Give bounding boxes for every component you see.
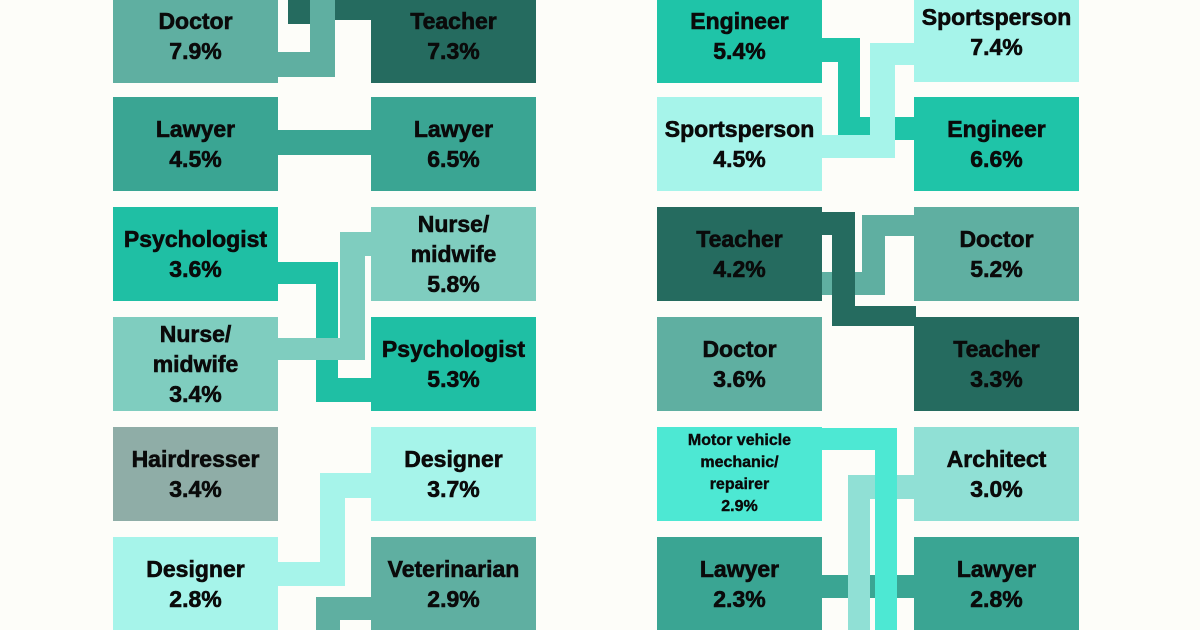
box: Engineer 6.6%: 6.6%: [970, 146, 1023, 172]
box: Hairdresser 3.4%: 3.4%: [169, 476, 222, 502]
box: Sportsperson 7.4%: Sportsperson: [922, 4, 1071, 30]
box: Teacher 7.3%: Teacher: [410, 8, 497, 34]
nurse line: [276, 232, 373, 360]
box: Lawyer 4.5%: Lawyer: [156, 116, 235, 142]
box: Teacher 3.3%: [914, 317, 1079, 411]
box: Motor vehicle mechanic 2.9%: 2.9%: [721, 498, 758, 515]
box: Engineer 6.6%: Engineer: [947, 116, 1046, 142]
teacher line right: [820, 212, 916, 326]
box: Doctor 3.6%: 3.6%: [713, 366, 766, 392]
box: Lawyer 2.8%: Lawyer: [957, 556, 1036, 582]
box: Doctor 3.6%: [657, 317, 822, 411]
box: Doctor 5.2%: [914, 207, 1079, 301]
box: Teacher 4.2%: Teacher: [696, 226, 783, 252]
veterinarian line: [316, 597, 373, 630]
box: Doctor 5.2%: 5.2%: [970, 256, 1023, 282]
box: Sportsperson 7.4%: [914, 0, 1079, 82]
box: Sportsperson 4.5%: 4.5%: [713, 146, 766, 172]
box: Teacher 4.2%: 4.2%: [713, 256, 766, 282]
box: Nurse/midwife 3.4%: midwife: [153, 351, 238, 377]
box: Psychologist 3.6%: [113, 207, 278, 301]
box: Sportsperson 4.5%: [657, 97, 822, 191]
box: Nurse/midwife 3.4%: 3.4%: [169, 381, 222, 407]
box: Architect 3.0%: [914, 427, 1079, 521]
box: Teacher 7.3%: [371, 0, 536, 83]
box: Veterinarian 2.9%: [371, 537, 536, 630]
designer line: [276, 473, 373, 586]
box: Motor vehicle mechanic 2.9%: repairer: [710, 476, 769, 493]
box: Designer 2.8%: [113, 537, 278, 630]
teacher stubs: [288, 0, 375, 24]
box: Nurse/midwife 5.8%: midwife: [411, 241, 496, 267]
box: Veterinarian 2.9%: 2.9%: [427, 586, 480, 612]
box: Architect 3.0%: 3.0%: [970, 476, 1023, 502]
box: Designer 2.8%: 2.8%: [169, 586, 222, 612]
lawyer line right: [820, 575, 916, 598]
lawyer line left: [276, 130, 373, 155]
box: Nurse/midwife 3.4%: Nurse/: [160, 321, 231, 347]
box: Designer 3.7%: [371, 427, 536, 521]
sportsperson line: [820, 43, 916, 158]
box: Lawyer 2.8%: 2.8%: [970, 586, 1023, 612]
box: Lawyer 2.3%: 2.3%: [713, 586, 766, 612]
box: Motor vehicle mechanic 2.9%: mechanic/: [700, 454, 779, 471]
box: Hairdresser 3.4%: Hairdresser: [132, 446, 259, 472]
doctor line right: [820, 215, 916, 295]
box: Psychologist 5.3%: 5.3%: [427, 366, 480, 392]
box: Designer 3.7%: 3.7%: [427, 476, 480, 502]
box: Psychologist 5.3%: Psychologist: [382, 336, 525, 362]
box: Doctor 7.9%: [113, 0, 278, 83]
architect line: [848, 475, 916, 630]
box: Nurse/midwife 5.8%: [371, 207, 536, 301]
box: Engineer 6.6%: [914, 97, 1079, 191]
box: Lawyer 6.5%: Lawyer: [414, 116, 493, 142]
box: Motor vehicle mechanic 2.9%: Motor vehicle: [688, 432, 791, 449]
box: Teacher 3.3%: Teacher: [953, 336, 1040, 362]
box: Doctor 7.9%: Doctor: [158, 8, 233, 34]
box: Designer 2.8%: Designer: [146, 556, 245, 582]
box: Psychologist 3.6%: 3.6%: [169, 256, 222, 282]
box: Hairdresser 3.4%: [113, 427, 278, 521]
box: Nurse/midwife 5.8%: Nurse/: [418, 211, 489, 237]
box: Architect 3.0%: Architect: [947, 446, 1046, 472]
box: Veterinarian 2.9%: Veterinarian: [388, 556, 519, 582]
box: Nurse/midwife 5.8%: 5.8%: [427, 271, 480, 297]
box: Doctor 7.9%: 7.9%: [169, 38, 222, 64]
box: Nurse/midwife 3.4%: [113, 317, 278, 411]
box: Psychologist 3.6%: Psychologist: [124, 226, 267, 252]
box: Lawyer 2.8%: [914, 537, 1079, 630]
box: Teacher 3.3%: 3.3%: [970, 366, 1023, 392]
engineer line: [820, 38, 916, 140]
mechanic line: [820, 428, 897, 630]
box: Lawyer 6.5%: 6.5%: [427, 146, 480, 172]
box: Psychologist 5.3%: [371, 317, 536, 411]
box: Teacher 7.3%: 7.3%: [427, 38, 480, 64]
box: Lawyer 2.3%: [657, 537, 822, 630]
psychologist line: [276, 262, 373, 402]
box: Teacher 4.2%: [657, 207, 822, 301]
box: Lawyer 4.5%: 4.5%: [169, 146, 222, 172]
box: Doctor 5.2%: Doctor: [959, 226, 1034, 252]
box: Engineer 5.4%: 5.4%: [713, 38, 766, 64]
box: Engineer 5.4%: [657, 0, 822, 83]
box: Doctor 3.6%: Doctor: [702, 336, 777, 362]
box: Sportsperson 7.4%: 7.4%: [970, 34, 1023, 60]
box: Lawyer 2.3%: Lawyer: [700, 556, 779, 582]
box: Designer 3.7%: Designer: [404, 446, 503, 472]
box: Engineer 5.4%: Engineer: [690, 8, 789, 34]
box: Lawyer 6.5%: [371, 97, 536, 191]
box: Sportsperson 4.5%: Sportsperson: [665, 116, 814, 142]
box: Lawyer 4.5%: [113, 97, 278, 191]
box: Motor vehicle mechanic 2.9%: [657, 427, 822, 521]
doctor line left: [276, 0, 335, 77]
